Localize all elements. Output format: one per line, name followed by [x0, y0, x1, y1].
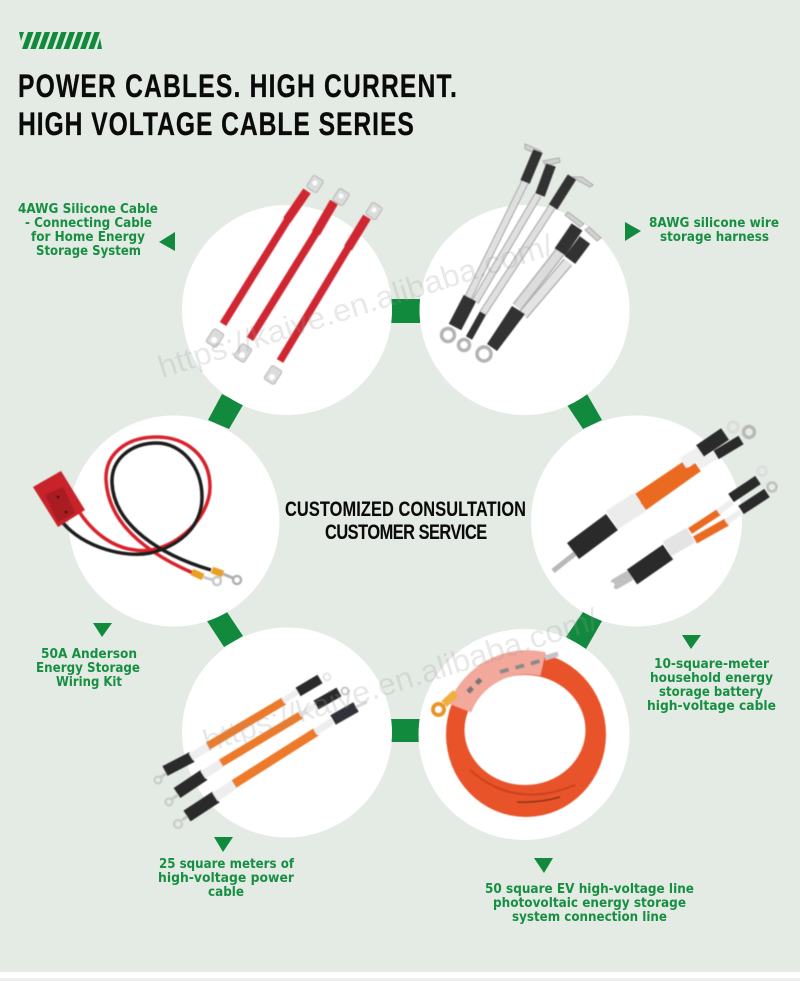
label: 8AWG silicone wire: 8AWG silicone wire [649, 215, 779, 231]
watermark: upper: https://kaive.en.alibaba.com/ [154, 227, 557, 385]
label: 50A Anderson: Energy Storage [36, 660, 140, 676]
header stripe icon [19, 32, 102, 49]
label: 8AWG silicone wire [625, 215, 779, 245]
watermark: lower: https://kaive.en.alibaba.com/ [199, 601, 602, 759]
label: 50 square EV: photovoltaic energy storage [493, 895, 686, 911]
connectors between circles [207, 299, 602, 742]
panel: 4AWG silicone cable [182, 175, 392, 415]
label: 50A Anderson: Wiring Kit [56, 674, 122, 690]
label: 10-square-meter: 10-square-meter [654, 656, 769, 672]
heading: customized consultation: CUSTOMIZED CONSULTATION [285, 497, 526, 520]
label: 4AWG silicone cable [18, 201, 175, 259]
heading: customized consultation: CUSTOMER SERVICE [325, 520, 487, 543]
panel: 10-square-meter battery cable [531, 416, 776, 626]
label: 10-square-meter: household energy [650, 670, 773, 686]
label: 25 square meters: 25 square meters of [159, 856, 294, 872]
label: 4AWG silicone cable: 4AWG Silicone Cable [18, 201, 158, 217]
label: 8AWG silicone wire: storage harness [660, 229, 769, 245]
panel: 25 square high-voltage power cable [154, 628, 392, 838]
label: 10-square-meter [647, 635, 776, 714]
label: 10-square-meter: high-voltage cable [647, 698, 776, 714]
label: 50A Anderson [36, 623, 140, 690]
label: 4AWG silicone cable: Storage System [36, 243, 141, 259]
label: 4AWG silicone cable: - Connecting Cable [25, 215, 152, 231]
label: 25 square meters: high-voltage power [158, 870, 294, 886]
label: 25 square meters: cable [208, 884, 244, 900]
panel: 8AWG silicone wire harness [420, 144, 630, 415]
label: 50 square EV [485, 858, 694, 925]
title [18, 69, 457, 143]
label: 50 square EV: 50 square EV high-voltage line [485, 881, 694, 897]
panel: 50A Anderson wiring kit [33, 416, 280, 626]
label: 25 square meters [158, 837, 294, 900]
heading: customized consultation [285, 497, 526, 543]
title: HIGH VOLTAGE CABLE SERIES [18, 107, 414, 143]
label: 50 square EV: system connection line [512, 909, 667, 925]
label: 50A Anderson: 50A Anderson [41, 646, 137, 662]
panel: 50 square EV high-voltage line coil [418, 629, 630, 840]
label: 4AWG silicone cable: for Home Energy [31, 229, 145, 245]
label: 10-square-meter: storage battery [659, 684, 763, 700]
title: POWER CABLES. HIGH CURRENT. [18, 69, 457, 105]
